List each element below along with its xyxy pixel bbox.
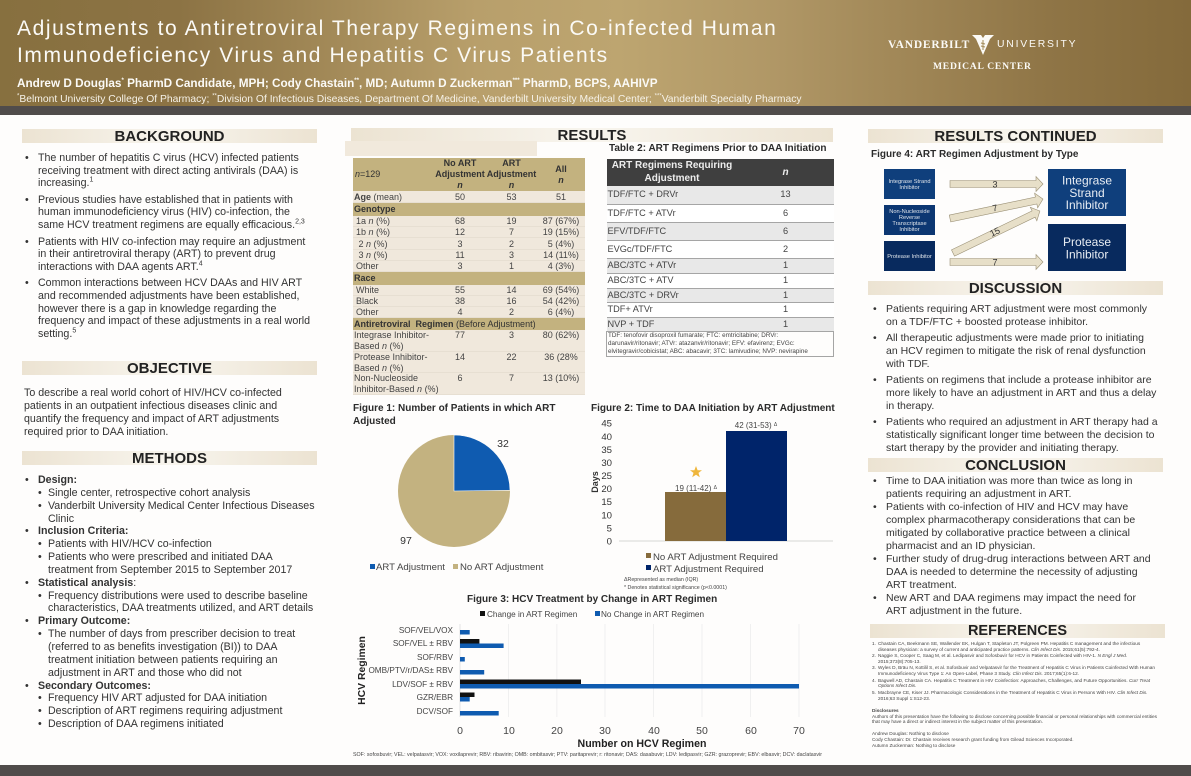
text: references list: Immunodeficiency Virus Type 1: An Open-Label, Phase 3 Study. Clin Infect Dis. 2017;65(1):6-12. [878, 671, 1079, 676]
heading: objective [22, 361, 317, 375]
table 1: baseline characteristics [353, 158, 585, 395]
diagram: figure 4 flow: Protease Inhibitor [887, 254, 932, 260]
chart: figure 1 pie: 32 [497, 438, 509, 450]
text: background bullets: and recommended adjustments have been established, [38, 290, 299, 302]
table 2: ART regimens: 6 [783, 226, 788, 236]
heading: methods [22, 451, 317, 465]
heading: figure 1 title: Figure 1: Number of Patients in which ART [353, 403, 555, 414]
chart: figure 1 pie: 97 [400, 535, 412, 547]
diagram: figure 4 flow: Non-Nucleoside [889, 209, 930, 215]
text: references list: Chastain CA, Beekmann SE, Wallender EK, Hulgan T, Stapleton JT, Polgreen PM. Hepatitis C management and the infectious [878, 641, 1140, 646]
heading: results continued [868, 129, 1163, 143]
table 1: baseline characteristics: White [356, 285, 379, 295]
text: methods: Single center, retrospective cohort analysis [48, 487, 250, 499]
chart: figure 2 bars: 25 [601, 471, 612, 482]
table 1: baseline characteristics: n=129 [355, 169, 380, 179]
diagram: figure 4 flow: 7 [992, 258, 998, 268]
table 1: baseline characteristics: 36 (28% [544, 352, 578, 362]
chart: figure 2 bars: 10 [601, 510, 612, 522]
text: discussion bullets: more likely to have an adjustment in ART and thus a delay [886, 387, 1156, 399]
table 2: ART regimens: EVGc/TDF/FTC [608, 244, 672, 254]
chart: figure 3 horizontal bars: 20 [551, 725, 563, 737]
table 1: baseline characteristics: 13 (10%) [543, 373, 579, 383]
text: methods: Secondary Outcomes: [38, 680, 151, 692]
table 2: ART regimens: TDF: tenofovir disoproxil fumarate; FTC: emtricitabine; DRVr: [608, 332, 778, 338]
table 1: baseline characteristics: 54 (42%) [543, 296, 579, 306]
diagram: figure 4 flow: Reverse [899, 215, 920, 221]
chart: figure 3 horizontal bars: GZR/EBR [417, 693, 453, 702]
chart: figure 3 horizontal bars: SOF: sofosbuvir; VEL: velpatasvir; VOX: voxilaprevir; RBV: ribavirin; OMB: ombitasvir; PTV: paritaprevir; r: ritonavir; DAS: dasabuvir; LDV: ledipasvir; GZR: grazoprevir; EBV: elbasvir; DCV: daclatasvir [353, 752, 822, 758]
chart: figure 2 bars: 30 [601, 458, 612, 469]
table 1: baseline characteristics: All [555, 164, 567, 174]
text: background bullets: Previous studies have established that in patients with [38, 194, 293, 206]
logo: Vanderbilt University Medical Center: VANDERBILT [888, 39, 970, 51]
chart: figure 3 horizontal bars [353, 610, 822, 758]
heading: figure 1 title: Adjusted [353, 416, 396, 426]
text: references list: 4. [872, 678, 876, 683]
chart: figure 2 bars: Δ [774, 422, 778, 428]
chart: figure 3 horizontal bars: 50 [696, 725, 708, 737]
text: background bullets: receiving treatment with direct acting antivirals (DAA) is [38, 165, 298, 177]
table 2: ART regimens: 1 [783, 318, 788, 328]
text: methods: Primary Outcome: [38, 615, 130, 627]
text: background bullets: frequency and impact of these adjustments in a real world [38, 315, 310, 327]
text: methods: Description of DAA regimens initiated [48, 718, 224, 730]
text: background bullets: human immunodeficiency virus (HIV) co-infection, the [38, 206, 290, 218]
text: methods: Inclusion Criteria: [38, 525, 128, 537]
text: methods: Patients who were prescribed and initiated DAA [48, 551, 273, 563]
table 2: ART regimens [606, 159, 834, 357]
text: methods: (referred to as benefits investigation (BI)) to DAA [48, 641, 277, 653]
chart: figure 2 bars: * Denotes statistical significance (p<0.0001) [624, 585, 727, 591]
table 2: ART regimens: 13 [780, 189, 791, 199]
logo: Vanderbilt University Medical Center: UNIVERSITY [997, 39, 1077, 50]
table 1: baseline characteristics: 55 [455, 285, 465, 295]
table 2: ART regimens: 1 [783, 260, 788, 270]
table 2: ART regimens: 1 [783, 275, 788, 285]
diagram: figure 4 flow: 15 [988, 225, 1002, 239]
text: references list: 2. [872, 653, 876, 658]
logo: Vanderbilt University Medical Center: MEDICAL CENTER [933, 61, 1032, 72]
table 2: ART regimens: darunavir/ritonavir; ATVr: atazanvir/ritonavir; EFV: efavirenz; EVGc: [608, 340, 795, 346]
text: methods: Design: [38, 474, 77, 486]
chart: figure 1 pie [370, 435, 544, 573]
text: methods: treatment from September 2015 to September 2017 [48, 564, 292, 576]
table 1: baseline characteristics: 2 [509, 238, 514, 248]
chart: figure 3 horizontal bars: No Change in ART Regimen [601, 610, 704, 619]
diagram: figure 4 flow [884, 169, 1126, 271]
table 1: baseline characteristics: 80 (62%) [543, 330, 579, 340]
chart: figure 2 bars: 19 (11-42) [675, 484, 711, 493]
heading: table 2 title: Table 2: ART Regimens Prior to DAA Initiation [609, 143, 826, 154]
text: methods: characteristics, DAA treatments utilized, and ART details [48, 602, 313, 614]
chart: figure 3 horizontal bars: 60 [745, 725, 757, 737]
chart: figure 3 horizontal bars: 70 [793, 725, 805, 737]
text: discussion bullets: an HCV regimen to mitigate the risk of renal dysfunction [886, 345, 1146, 357]
text: discussion bullets: in therapy. [886, 400, 934, 412]
table 1: baseline characteristics: 38 [455, 296, 465, 306]
text: references list: 5. [872, 690, 876, 695]
chart: figure 3 horizontal bars: DCV/SOF [417, 707, 453, 716]
chart: figure 3 horizontal bars: HCV Regimen [357, 636, 368, 705]
table 2: ART regimens: ABC/3TC + ATVr [608, 260, 676, 270]
table 2: ART regimens: ABC/3TC + DRVr [608, 290, 679, 300]
chart: figure 2 bars: 40 [601, 432, 612, 443]
text: references list: Options Infect Dis. [878, 683, 916, 688]
table 2: ART regimens: TDF+ ATVr [608, 304, 653, 314]
mask over table 1 title [345, 141, 537, 156]
text: conclusion bullets: DAA is needed to determine the necessity of adjusting [886, 566, 1138, 578]
text: discussion bullets: Patients who required an adjustment in ART therapy had a [886, 416, 1158, 428]
heading: background: BACKGROUND [114, 128, 224, 145]
table 1: baseline characteristics: 7 [509, 373, 514, 383]
table 2: ART regimens: n [782, 167, 789, 178]
text: references list: Disclosures [872, 708, 899, 713]
affiliations: *Belmont University College Of Pharmacy; **Division Of Infectious Diseases, Department Of Medicine, Vanderbilt University Medical Center; ***Vanderbilt Specialty Pharmacy [17, 94, 802, 105]
table 1: baseline characteristics: Non-Nucleoside [354, 373, 418, 383]
text: references list: diseases physician: a survey of current and anticipated practice patterns. Clin Infect Dis. 2015;61(5):792-4. [878, 647, 1100, 652]
text: references list: 1. [872, 641, 876, 646]
table 1: baseline characteristics: 16 [506, 296, 516, 306]
table 2: ART regimens: ART Regimens Requiring [612, 160, 732, 171]
table 2: ART regimens: 2 [783, 244, 788, 254]
diagram: figure 4 flow: 7 [992, 203, 998, 213]
text: references list: Andrew Douglas: Nothing to disclose [872, 731, 949, 736]
text: conclusion bullets: complex pharmacotherapy considerations that can be [886, 514, 1135, 526]
text: methods: Vanderbilt University Medical Center Infectious Diseases [48, 500, 315, 512]
heading: methods: METHODS [132, 450, 207, 467]
chart: figure 1 pie: ART Adjustment [376, 562, 445, 573]
table 1: baseline characteristics: Genotype [354, 204, 396, 214]
table 1: baseline characteristics: 19 (15%) [543, 227, 579, 237]
chart: figure 3 horizontal bars: SOF/VEL ± RBV [393, 639, 454, 648]
table 1: baseline characteristics: Adjustment [487, 169, 536, 179]
table 2: ART regimens: 6 [783, 208, 788, 218]
text: methods [25, 474, 315, 730]
heading: results [351, 128, 833, 142]
table 1: baseline characteristics: 51 [556, 192, 566, 202]
diagram: figure 4 flow: Inhibitor [899, 185, 920, 191]
chart: figure 2 bars [590, 418, 833, 591]
chart: figure 3 horizontal bars: 30 [599, 725, 611, 737]
heading: figure 2 title: Figure 2: Time to DAA Initiation by ART Adjustment [591, 403, 835, 414]
header banner [0, 0, 1191, 115]
text: references list: Autumn Zuckerman: Nothing to disclose [872, 743, 955, 748]
table 1: baseline characteristics: n [558, 174, 564, 184]
text: methods: Statistical analysis: [38, 577, 136, 589]
title: Adjustments to Antiretroviral Therapy Regimens in Co-infected Human [17, 17, 777, 40]
table 1: baseline characteristics: 3 n (%) [358, 250, 388, 260]
table 1: baseline characteristics: Based n (%) [354, 362, 404, 372]
chart: figure 2 bars: No ART Adjustment Required [653, 552, 778, 563]
text: conclusion bullets: New ART and DAA regimens may impact the need for [886, 592, 1136, 604]
text: conclusion bullets: Time to DAA initiation was more than twice as long in [886, 475, 1132, 487]
chart: figure 2 bars: 45 [601, 418, 612, 430]
table 2: ART regimens: TDF/FTC + DRVr [608, 189, 678, 199]
text: references list: Macbrayne CE, Kiser JJ. Pharmacologic Considerations in the Treatment of Hepatitis C Virus in Persons With HIV. Clin Infect Dis. [878, 690, 1148, 695]
table 1: baseline characteristics: 2 [509, 307, 514, 317]
chart: figure 3 horizontal bars: LDV/SOF ± RBV [392, 680, 454, 689]
table 1: baseline characteristics: Integrase Inhibitor- [354, 330, 429, 340]
table 2: ART regimens: ABC/3TC + ATV [608, 275, 673, 285]
table 1: baseline characteristics: 7 [509, 227, 514, 237]
text: conclusion bullets: ART adjustment in the future. [886, 605, 1022, 617]
chart: figure 1 pie: No ART Adjustment [460, 562, 544, 573]
heading: discussion: DISCUSSION [969, 280, 1062, 297]
table 1: baseline characteristics: Inhibitor-Based n (%) [354, 384, 439, 394]
text: discussion bullets: with TDF. [886, 358, 930, 370]
table 1: baseline characteristics: Black [356, 296, 378, 306]
table 1: baseline characteristics: 14 [455, 352, 465, 362]
text: objective: quantify the frequency and impact of ART adjustments [24, 413, 279, 425]
heading: results continued: RESULTS CONTINUED [934, 128, 1097, 145]
chart: figure 2 bars: 20 [601, 484, 612, 495]
text: discussion bullets: All therapeutic adjustments were made prior to initiating [886, 332, 1144, 344]
table 1: baseline characteristics: 6 (4%) [548, 307, 574, 317]
table 1: baseline characteristics: 68 [455, 216, 465, 226]
table 2: ART regimens: Adjustment [644, 172, 700, 184]
text: background bullets: The number of hepatitis C virus (HCV) infected patients [38, 152, 299, 164]
table 1: baseline characteristics: 1 [509, 261, 514, 271]
heading: background [22, 129, 317, 143]
text: discussion bullets: on a TDF/FTC + boosted protease inhibitor. [886, 316, 1088, 328]
title: Immunodeficiency Virus and Hepatitis C Virus Patients [17, 44, 609, 66]
text: references list: Authors of this presentation have the following to disclose concerning possible financial or personal relationships with commercial entities [872, 714, 1157, 719]
chart: figure 2 bars: ΔRepresented as median (IQR) [624, 577, 698, 583]
heading: references [870, 624, 1165, 638]
chart: figure 2 bars: 35 [601, 445, 612, 456]
table 2: ART regimens: elvitegravir/cobicistat; ABC: abacavir; 3TC: lamivudine; NVP: nevirapine [608, 348, 808, 354]
text: background bullets: Patients with HIV co-infection may require an adjustment [38, 236, 305, 248]
table 1: baseline characteristics: 69 (54%) [543, 285, 579, 295]
text: methods: Frequency distributions were used to describe baseline [48, 590, 308, 602]
diagram: figure 4 flow: Inhibitor [899, 227, 920, 233]
table 1: baseline characteristics: n [457, 180, 463, 190]
text: background bullets: however there is a gap in knowledge regarding the [38, 303, 276, 315]
table 1: baseline characteristics: 11 [455, 250, 465, 260]
text: methods: The number of days from prescriber decision to treat [48, 628, 295, 640]
diagram: figure 4 flow: Inhibitor [1066, 248, 1108, 262]
chart: figure 2 bars: 0 [607, 536, 612, 548]
text: discussion bullets: Patients requiring ART adjustment were most commonly [886, 303, 1147, 315]
text: background bullets [25, 152, 310, 340]
chart: figure 3 horizontal bars: Number on HCV Regimen [578, 738, 706, 750]
text: discussion bullets: statistically significant longer time between the decision to [886, 429, 1154, 441]
diagram: figure 4 flow: Strand [1069, 186, 1105, 200]
text: references list: Bagwell AD, Chastain CA. Hepatitis C Treatment in HIV Coinfection: Approaches, Challenges, and Future Opportunities. Curr Treat [878, 678, 1150, 683]
table 1: baseline characteristics: 3 [509, 250, 514, 260]
heading: figure 1 title [353, 403, 556, 426]
table 1: baseline characteristics: 3 [457, 238, 462, 248]
table 1: baseline characteristics: Other [356, 307, 379, 317]
diagram: figure 4 flow: 3 [992, 180, 998, 190]
header dark band [0, 106, 1191, 115]
diagram: figure 4 flow: Protease [1063, 235, 1111, 249]
heading: results: RESULTS [558, 127, 626, 144]
table 1: baseline characteristics: 19 [506, 216, 516, 226]
table 1: baseline characteristics: 14 [506, 285, 516, 295]
table 1: baseline characteristics: 1b n (%) [356, 227, 390, 237]
text: conclusion bullets: patients requiring an adjustment in ART. [886, 488, 1071, 500]
heading: references: REFERENCES [968, 623, 1067, 639]
text: references list: Wyles D, Bräu N, Kottilil S, et al. Sofosbuvir and Velpatasvir for the Treatment of Hepatitis C Virus in Patients Coinfected With Human [878, 665, 1155, 670]
text: conclusion bullets: mitigated by collaborative practice between a clinical [886, 527, 1130, 539]
footer band [0, 765, 1191, 776]
table 1: baseline characteristics: Protease Inhibitor- [354, 352, 428, 362]
text: conclusion bullets [873, 475, 1151, 617]
text: methods: adjustment in ART and those who did not [48, 667, 242, 679]
table 1: baseline characteristics: Age (mean) [354, 192, 402, 202]
text: references list: 2016;63 Suppl 1:S12-23. [878, 696, 930, 701]
title [17, 17, 777, 66]
chart: figure 3 horizontal bars: SOF/VEL/VOX [399, 626, 454, 635]
text: methods: treatment initiation between patients requiring an [48, 654, 278, 666]
chart: figure 2 bars: 15 [601, 497, 612, 508]
table 1: baseline characteristics: 12 [455, 227, 465, 237]
text: references list: Naggie S, Cooper C, Saag M, et al. Ledipasvir and Sofosbuvir for HCV in Patients Coinfected with HIV-1. N Engl J Med. [878, 653, 1127, 658]
table 1: baseline characteristics: 4 [457, 307, 462, 317]
table 1: baseline characteristics: Adjustment [435, 169, 485, 179]
table 2: ART regimens: 1 [783, 304, 788, 314]
chart: figure 3 horizontal bars: OMB/PTV/r/DAS± RBV [368, 666, 454, 675]
table 1: baseline characteristics: 87 (67%) [543, 216, 579, 226]
text: background bullets: setting.5 [38, 327, 76, 340]
chart: figure 2 bars: Days [590, 471, 600, 493]
heading: figure 3 title: Figure 3: HCV Treatment by Change in ART Regimen [467, 594, 717, 605]
table 1: baseline characteristics: Based n (%) [354, 341, 404, 351]
table 2: ART regimens: NVP + TDF [608, 318, 654, 328]
text: conclusion bullets: ART treatment. [886, 579, 957, 591]
text: objective: patients in an outpatient infectious diseases clinic and [24, 400, 277, 412]
table 2: ART regimens: 1 [783, 290, 788, 300]
table 1: baseline characteristics: Race [354, 273, 376, 283]
heading: conclusion: CONCLUSION [965, 457, 1066, 474]
chart: figure 2 bars: 5 [607, 524, 612, 534]
table 1: baseline characteristics: Other [356, 261, 379, 271]
chart: figure 2 bars: 42 (31-53) [735, 421, 772, 430]
text: references list: Cody Chastain: Dr. Chastain receives research grant funding from Gilead Sciences Incorporated. [872, 737, 1074, 742]
diagram: figure 4 flow: Transcriptase [892, 221, 927, 227]
diagram: figure 4 flow: Inhibitor [1066, 198, 1108, 212]
text: objective: required prior to DAA initiation. [24, 426, 168, 438]
diagram: figure 4 flow: Integrase Strand [888, 179, 931, 185]
table 1: baseline characteristics: Antiretroviral Regimen (Before Adjustment) [354, 318, 536, 328]
text: conclusion bullets: Patients with co-infection of HIV and HCV may have [886, 501, 1128, 513]
chart: figure 2 bars: ART Adjustment Required [653, 564, 764, 575]
heading: conclusion [868, 458, 1163, 472]
text: background bullets: interactions with DAA agents ART.4 [38, 260, 203, 273]
text: methods: Frequency HIV ART adjusted for DAA initiation [48, 692, 267, 704]
table 1: baseline characteristics: 4 (3%) [548, 261, 574, 271]
heading: figure 4 title: Figure 4: ART Regimen Adjustment by Type [871, 149, 1078, 160]
table 1: baseline characteristics: 5 (4%) [548, 238, 574, 248]
text: discussion bullets [873, 303, 1158, 454]
text: discussion bullets: start therapy by the provider and initiating therapy. [886, 442, 1119, 454]
table 2: ART regimens: EFV/TDF/FTC [608, 226, 666, 236]
chart: figure 3 horizontal bars: SOF/RBV [417, 653, 454, 662]
text: methods: Clinic [48, 513, 74, 525]
table 1: baseline characteristics: 14 (11%) [543, 250, 579, 260]
text: objective: To describe a real world cohort of HIV/HCV co-infected [24, 387, 282, 399]
text: background bullets: in their antiretroviral therapy (ART) to prevent drug [38, 248, 276, 260]
text: conclusion bullets: pharmacist and an ID physician. [886, 540, 1035, 552]
text: references list: 3. [872, 665, 876, 670]
table 2: ART regimens: TDF/FTC + ATVr [608, 208, 676, 218]
diagram: figure 4 flow: Integrase [1062, 174, 1112, 188]
text: background bullets: same HCV treatment regimens are equally efficacious.2,3 [38, 218, 305, 231]
text: discussion bullets: Patients on regimens that include a protease inhibitor are [886, 374, 1152, 386]
text: background bullets: Common interactions between HCV DAAs and HIV ART [38, 277, 302, 289]
table 1: baseline characteristics: 77 [455, 330, 465, 340]
text: references list: that may have a direct or indirect interest in the subject matter of this presentation. [872, 719, 1043, 724]
table 1: baseline characteristics: 50 [455, 192, 465, 202]
table 1: baseline characteristics: 1a n (%) [356, 216, 390, 226]
table 1: baseline characteristics: 3 [457, 261, 462, 271]
table 1: baseline characteristics: No ART [444, 158, 476, 168]
heading: objective: OBJECTIVE [127, 360, 212, 377]
table 1: baseline characteristics: 22 [506, 352, 516, 362]
table 1: baseline characteristics: 6 [457, 373, 462, 383]
table 1: baseline characteristics: 3 [509, 330, 514, 340]
table 1: baseline characteristics: ART [502, 158, 521, 168]
text: objective [24, 387, 282, 438]
text: conclusion bullets: Further study of drug-drug interactions between ART and [886, 553, 1151, 565]
text: references list [872, 641, 1157, 748]
text: methods: Description of ART regimens requiring adjustment [48, 705, 282, 717]
authors: Andrew D Douglas* PharmD Candidate, MPH; Cody Chastain**, MD; Autumn D Zuckerman*** PharmD, BCPS, AAHIVP [17, 77, 658, 90]
chart: figure 3 horizontal bars: 40 [648, 725, 660, 737]
chart: figure 3 horizontal bars: 0 [457, 725, 463, 737]
text: methods: Patients with HIV/HCV co-infection [48, 538, 212, 550]
text: references list: 2015;373(8):705-13. [878, 659, 921, 664]
table 1: baseline characteristics: 2 n (%) [358, 238, 388, 248]
table 1: baseline characteristics: n [509, 180, 514, 190]
chart: figure 2 bars: Δ [714, 485, 718, 491]
chart: figure 3 horizontal bars: Change in ART Regimen [487, 610, 578, 619]
text: background bullets: increasing.1 [38, 177, 93, 189]
logo: Vanderbilt University Medical Center [888, 35, 1077, 72]
chart: figure 3 horizontal bars: 10 [503, 725, 515, 737]
heading: discussion [868, 281, 1163, 295]
table 1: baseline characteristics: 53 [506, 192, 516, 202]
